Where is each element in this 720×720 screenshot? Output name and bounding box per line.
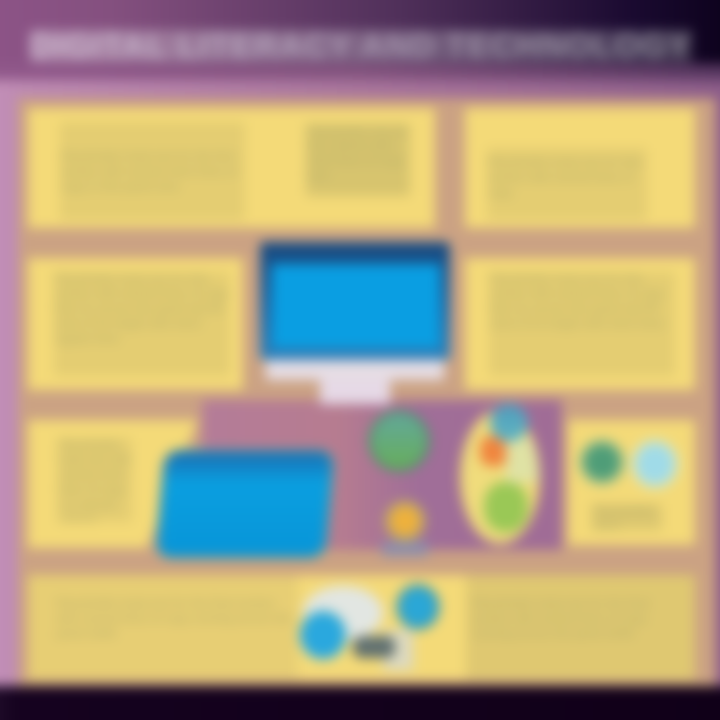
- panel: top right: [465, 108, 695, 228]
- text block: Placeholder body text for the final section with several lines of copy running across the panel width: [56, 598, 291, 640]
- panel: middle right: [465, 258, 695, 390]
- illustration: bottom circles: [290, 575, 449, 677]
- blue circle left: [301, 612, 345, 658]
- panel: top left: [28, 108, 435, 228]
- monitor screen: [272, 264, 440, 348]
- text block: [489, 272, 675, 376]
- chart: colour oval: [462, 412, 538, 542]
- text block: [60, 122, 245, 220]
- text block: [466, 575, 695, 680]
- header banner: [0, 0, 720, 80]
- text block: Placeholder body text for the first section with several short lines of copy in this panel area: [60, 151, 237, 193]
- oval pale segment: [506, 438, 538, 482]
- tan horizontal bands: [18, 98, 716, 688]
- blue circle right: [400, 588, 436, 626]
- oval green segment: [484, 482, 528, 532]
- panel: lower right: [568, 420, 695, 545]
- panel: bottom band: [28, 575, 695, 680]
- text block: Placeholder body text for this section with several lines of copy: [487, 157, 642, 199]
- oval top cap: [490, 404, 528, 442]
- monitor stand: [320, 352, 390, 404]
- center purple panel: [202, 400, 562, 550]
- text block: [54, 272, 230, 376]
- panel: lower left: [28, 420, 198, 548]
- monitor bezel: [260, 242, 450, 360]
- icon: light blue circle: [636, 444, 674, 484]
- text block: Placeholder body text for this section with several lines of copy that run across the panel and fill most of its height with short regular lines: [54, 273, 229, 345]
- tablet: [157, 452, 333, 556]
- footer: [0, 686, 720, 720]
- icon: green circle: [584, 444, 620, 480]
- icon: green circle badge: [372, 414, 426, 468]
- text block: [487, 148, 647, 220]
- header lower tint: [0, 64, 720, 80]
- oval orange segment: [480, 436, 508, 466]
- text block: [28, 575, 298, 680]
- pale connector: [383, 630, 413, 670]
- text block: Placeholder body text for this section with several lines of copy that run across the panel and fill most of its height with short lines: [489, 273, 664, 330]
- monitor: [250, 232, 460, 412]
- icon: blue-grey base: [382, 542, 428, 556]
- panel: middle left: [28, 258, 243, 390]
- text block: Placeholder body text for the final section with several lines of copy running across the panel width: [472, 598, 649, 640]
- text block: Placeholder text for this column with short lines of copy here: [306, 125, 409, 182]
- dark device: [353, 636, 395, 658]
- white glow: [303, 586, 383, 640]
- icon: small orange badge: [390, 506, 420, 536]
- monitor chin: [266, 358, 444, 380]
